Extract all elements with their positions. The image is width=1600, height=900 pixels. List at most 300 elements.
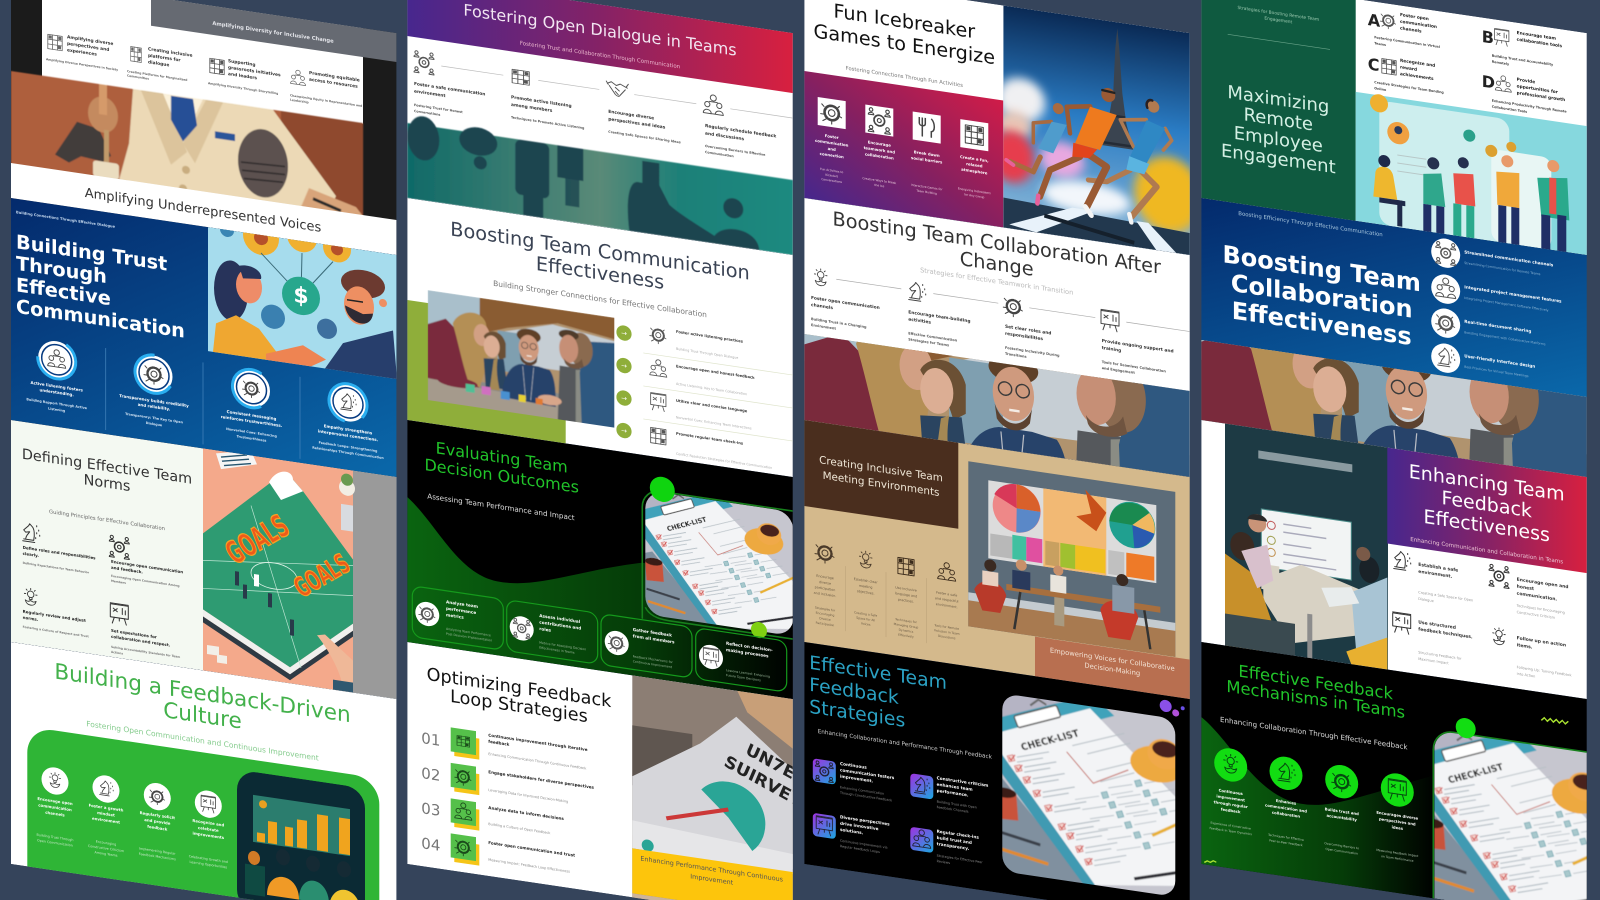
photo: silhouettes on teal xyxy=(407,114,793,255)
activity 3: Team Building xyxy=(916,188,937,196)
item: review xyxy=(23,587,89,639)
item: recognize: improvements xyxy=(193,830,225,840)
green panel xyxy=(27,726,379,900)
heading: Strategies xyxy=(809,696,905,732)
item: equitable access: access to resources xyxy=(309,77,358,90)
photo: checklist: CHECK-LIST xyxy=(666,515,708,533)
item: recognize: Learning Opportunities xyxy=(189,860,227,870)
heading: Through xyxy=(16,252,107,288)
photo: checklist xyxy=(1388,708,1600,900)
heading: Fostering Open Dialogue in Teams xyxy=(463,0,737,60)
header block: Creating Inclusive Team xyxy=(819,454,943,484)
item: support: and Engagement xyxy=(1102,366,1135,375)
numbered row 02 xyxy=(421,759,594,812)
photo: meeting with charts xyxy=(968,461,1175,657)
column: consistent messaging: Nonverbal Cues: Enhancing xyxy=(226,427,277,438)
feature 1: Streamlined communication channels xyxy=(1464,249,1554,268)
activity 2: Encourage xyxy=(868,139,891,148)
photo: survey paper xyxy=(632,675,806,900)
item D: professional growth xyxy=(1517,90,1565,103)
Eiffel tower xyxy=(1101,26,1133,150)
caption box: Empowering Voices for Collaborative xyxy=(1050,646,1175,673)
item: schedule: and discussions xyxy=(705,131,745,142)
item: continuous improvement xyxy=(1210,745,1252,836)
item: review: norms. xyxy=(23,615,39,622)
item: honest communication: honest xyxy=(1517,584,1535,592)
column: empathy: Relationships Through Communication xyxy=(312,446,384,460)
heading: Effectiveness xyxy=(536,252,664,294)
numbered row 01: feedback xyxy=(488,739,510,747)
item: safe environment: Establish a safe xyxy=(1418,563,1458,574)
activity 3: social barriers xyxy=(911,155,943,165)
item: open channels: Environment xyxy=(811,323,836,331)
subheading: Guiding Principles for Effective Collaboration xyxy=(49,509,165,532)
item: action items: into Action xyxy=(1517,672,1535,679)
column: empathy: interpersonal connections. xyxy=(318,428,379,442)
feature 4: Best Practices for Virtual Team Meetings xyxy=(1464,365,1529,378)
feature 3: Real-time document sharing xyxy=(1464,319,1531,334)
heading: Fun Icebreaker xyxy=(833,0,975,43)
item: solicit: and provide xyxy=(144,817,171,826)
item: clear roles: responsibilities xyxy=(1005,331,1043,342)
item: constructive criticism: Feedback Channels xyxy=(937,805,969,814)
numbered row 01: Continuous improvement through iterative xyxy=(488,733,587,752)
item: growth: mindset xyxy=(97,810,115,818)
card: contributions: Effectiveness in Teams xyxy=(539,646,575,655)
item: review: Fostering a Culture of Respect and Trust xyxy=(23,625,89,639)
divider lines xyxy=(106,348,300,459)
item: inclusive platforms: dialogue xyxy=(148,59,169,68)
card: analyze metrics: Post Decision Implementation xyxy=(446,632,492,643)
subheading: Fostering Trust and Collaboration Through Communication xyxy=(520,41,681,70)
item: objectives: Voices xyxy=(861,621,871,627)
item: diverse perspectives: Creating Safe Spaces for Sharing Ideas xyxy=(608,130,681,144)
item D: opportunities for xyxy=(1517,83,1559,96)
activity 2: collaboration xyxy=(865,151,894,161)
kicker: Boosting Efficiency Through Effective Communication xyxy=(1238,211,1383,238)
item: support: Tools for Seamless Collaboration xyxy=(1102,360,1166,373)
list arrows: → xyxy=(621,393,627,403)
slide: Amplifying Underrepresented Voices xyxy=(11,0,397,256)
item B: collaboration tools xyxy=(1517,37,1562,49)
item: participation: participation xyxy=(815,585,835,592)
item: continuous improvement: Continuous xyxy=(1219,788,1243,796)
item: constructive criticism: Building Trust with Open xyxy=(937,800,977,810)
item: enhances communication xyxy=(1265,754,1307,848)
item: solicit xyxy=(139,780,176,861)
column: active listening: Listening xyxy=(48,407,66,413)
item: language: Managing Group xyxy=(894,622,918,630)
photo: survey paper: Improvement xyxy=(690,872,734,887)
heading: Collaboration xyxy=(1231,269,1413,324)
header block xyxy=(804,420,958,529)
photo: survey paper: UN7E xyxy=(743,740,798,784)
green wave background xyxy=(1201,717,1436,899)
heading: Mechanisms in Teams xyxy=(1226,677,1405,722)
item: amplifying perspectives: experiences xyxy=(67,47,97,58)
column 3 of slides xyxy=(804,0,1277,900)
item: diverse perspectives: Continuous Improvement via xyxy=(840,839,888,850)
subheading: Enhancing Collaboration Through Effective Feedback xyxy=(1220,715,1408,752)
card: gather feedback: Continuous Improvement xyxy=(633,659,673,669)
item: clear roles xyxy=(1003,298,1060,364)
heading: Feedback xyxy=(809,674,899,709)
item: enhances communication: Peer-to-Peer Feedback xyxy=(1269,838,1303,847)
item: enhances communication: Techniques for Effective xyxy=(1268,833,1304,842)
heading: Boosting Team xyxy=(1222,240,1421,297)
item D: Enhancing Productivity Through Remote xyxy=(1492,99,1567,114)
item: expectations xyxy=(110,603,180,664)
heading: Maximizing xyxy=(1227,82,1329,118)
item: roles: clearly. xyxy=(23,551,39,558)
column: transparency: Dialogue xyxy=(146,421,163,427)
activity 2: teamwork and xyxy=(864,145,895,155)
item: diverse perspectives: perspectives and xyxy=(1379,816,1416,827)
item: objectives: Creating a Safe xyxy=(854,610,877,618)
item: equitable access xyxy=(290,70,362,107)
heading: Boosting Team Communication xyxy=(450,217,750,285)
item: team building xyxy=(908,281,970,351)
item: safe environment: Creating a Safe Space for Open xyxy=(1418,590,1473,603)
item: amplifying perspectives xyxy=(46,31,118,72)
column: transparency xyxy=(119,353,189,426)
slide: Enhancing Team Feedback Effectiveness xyxy=(1201,420,1587,699)
numbered row 04: Foster open communication and trust xyxy=(488,840,575,858)
heading: Norms xyxy=(84,472,130,495)
activity 3 xyxy=(911,111,943,197)
item: recognize: celebrate xyxy=(198,825,219,833)
item: clear roles: Fostering Inclusivity During xyxy=(1005,346,1059,358)
card: analyze metrics: performance xyxy=(446,606,476,615)
heading: Effective Feedback xyxy=(1238,662,1393,703)
heading: Employee xyxy=(1234,123,1323,157)
heading: Evaluating Team xyxy=(436,438,568,477)
item: diverse perspectives: ideas xyxy=(1392,824,1404,831)
heading: Loop Strategies xyxy=(450,687,588,727)
item: growth: Foster a growth xyxy=(89,803,123,813)
item: clear roles: Transitions xyxy=(1005,352,1027,359)
item: solicit: Regularly solicit xyxy=(140,810,175,820)
item: inclusive platforms: Creating inclusive xyxy=(148,47,192,59)
item: open channels: Foster open communication xyxy=(811,296,880,311)
photo: clay speaker at microphone xyxy=(11,71,363,219)
activity 4: Energizing Icebreakers xyxy=(958,186,991,195)
illustration: audience watching bar chart xyxy=(237,769,365,900)
heading: Enhancing Team xyxy=(1409,460,1565,506)
item: respectful environment: environment. xyxy=(936,602,958,609)
item: channels: Building Trust Through xyxy=(37,833,73,842)
photo: checklist xyxy=(957,672,1277,900)
item C: reward xyxy=(1400,64,1417,73)
left runner xyxy=(1033,119,1051,146)
connector lines xyxy=(441,66,792,118)
item B: Encourage team xyxy=(1517,31,1556,42)
kicker: Engagement xyxy=(1264,15,1293,25)
item: support: Provide ongoing support and xyxy=(1102,339,1174,355)
item: respectful environment: Inclusion in Team xyxy=(934,628,960,636)
column: empathy xyxy=(312,382,384,459)
card: reflect xyxy=(696,628,787,692)
item: inclusive platforms: Communities xyxy=(127,74,149,81)
item: expectations: Setting Accountability Standards for Team xyxy=(111,645,180,659)
activity 4 xyxy=(958,119,991,200)
item: constructive criticism xyxy=(910,771,989,817)
item: open channels: channels xyxy=(811,302,833,311)
item: open communication: and feedback. xyxy=(111,565,143,575)
slide: Evaluating Team Decision Outcomes xyxy=(407,420,850,708)
kicker: Strategies for Boosting Remote Team xyxy=(1237,6,1319,23)
list arrows: → xyxy=(621,328,627,338)
accent dots xyxy=(650,475,767,639)
item: safe environment: Foster a safe communication xyxy=(414,82,485,98)
slide subtitle band text: Amplifying Diversity for Inclusive Change xyxy=(212,21,334,45)
green side panel xyxy=(1201,0,1356,221)
list item 1: Building Trust Through Open Dialogue xyxy=(676,347,738,360)
activity 3: Break down xyxy=(914,149,940,158)
numbered row 03: 03 xyxy=(421,799,440,820)
column: active listening: Active listening fosters xyxy=(31,380,83,393)
item C: Creative Strategies for Team Bonding xyxy=(1374,80,1444,95)
runners xyxy=(1006,73,1172,228)
item: active listening: among members xyxy=(511,102,553,114)
item: trust: Builds trust and xyxy=(1325,806,1359,816)
activity 2: Creative Ways to Break xyxy=(862,176,896,185)
item: objectives: objectives. xyxy=(857,589,875,596)
activity 1: Fun Activities to xyxy=(820,167,843,174)
item: equitable access: Championing Equity in Representation and xyxy=(290,93,362,108)
item: diverse perspectives: solutions. xyxy=(840,827,864,835)
item: channels: communication xyxy=(38,802,72,812)
item: roles: Define roles and responsibilities xyxy=(23,545,96,561)
item: recognize: Celebrating Growth and xyxy=(189,854,228,864)
list dividers xyxy=(643,353,793,441)
slide: Boosting Team Collaboration After Change xyxy=(804,198,1198,564)
numbered row 02: Leveraging Data for Improved Decision-Making xyxy=(488,788,568,804)
item: continuous communication: communication fosters xyxy=(840,767,895,780)
item: safe environment: Dialogue xyxy=(1418,597,1434,603)
item: equitable access: Leadership xyxy=(290,98,309,105)
item: open communication: Encourage open communication xyxy=(111,559,183,574)
item: continuous communication: Enhancing Communication xyxy=(840,785,884,796)
item: amplifying perspectives: perspectives and xyxy=(67,41,109,53)
activity 2 xyxy=(862,104,896,190)
item: diverse perspectives: perspectives and ideas xyxy=(608,116,666,131)
item: schedule xyxy=(703,94,777,165)
item: constructive criticism: performance. xyxy=(937,788,969,798)
heading: Change xyxy=(960,247,1034,281)
item: regular check-ins: Regular check-ins xyxy=(937,829,979,840)
item: regular check-ins: Reviews xyxy=(937,859,950,865)
photo: survey paper: Enhancing Performance Through Continuous xyxy=(640,855,783,884)
item: grassroots: Amplifying Diversity Through Storytelling xyxy=(208,81,278,96)
card: contributions: Assess individual xyxy=(539,613,580,624)
item: diverse perspectives: Measuring Feedback Impact xyxy=(1376,848,1418,858)
right runner xyxy=(1088,164,1130,186)
item: continuous improvement: feedback xyxy=(1221,807,1241,814)
item B: Building Trust and Accountability xyxy=(1492,54,1553,67)
item: equitable access: Promoting equitable xyxy=(309,71,360,84)
item: constructive criticism: Constructive criticism xyxy=(937,775,988,788)
item: recognize: Recognize and xyxy=(192,818,224,828)
figures xyxy=(1373,133,1569,254)
subheading: Enhancing Communication and Collaboration in Teams xyxy=(1410,537,1563,566)
numbered row 02: 02 xyxy=(421,764,440,785)
feature 1: Streamlining Communication for Remote Teams xyxy=(1464,261,1541,276)
item: amplifying perspectives: Amplifying Diverse Perspectives in Society xyxy=(46,57,118,72)
item: continuous improvement: Experience of Constructive xyxy=(1211,821,1251,831)
item: honest communication: communication. xyxy=(1517,591,1557,603)
numbered row 03: Analyze data to inform decisions xyxy=(488,805,564,821)
column: empathy: Empathy strengthens xyxy=(324,423,372,435)
numbered row 04: 04 xyxy=(421,834,440,855)
accent dots xyxy=(1160,699,1185,718)
card: analyze metrics xyxy=(412,586,503,650)
item A xyxy=(1368,7,1440,55)
item: action items: Following Up: Turning Feedback xyxy=(1517,665,1572,677)
item: solicit: Implementing Regular xyxy=(139,846,176,856)
item: continuous communication: Through Constructive Feedback xyxy=(839,791,892,802)
item: structured feedback: Maximum Impact xyxy=(1418,657,1449,665)
item: open communication: Encouraging Open Communication Among xyxy=(111,574,180,588)
item: diverse perspectives: drive innovative xyxy=(840,821,879,831)
item: open channels xyxy=(811,268,880,337)
center runner xyxy=(1040,151,1080,203)
item: growth: Constructive Criticism xyxy=(88,844,124,853)
subheading: Building Stronger Connections for Effective Collaboration xyxy=(493,279,707,319)
column dividers xyxy=(846,566,927,643)
photo: meeting room with whiteboard xyxy=(1225,424,1388,670)
item D: Collaboration Tools xyxy=(1492,105,1527,114)
slide: Defining Effective Team Norms xyxy=(11,415,397,699)
item: safe environment xyxy=(414,50,485,124)
item: structured feedback: feedback techniques. xyxy=(1418,626,1473,640)
squiggle accents xyxy=(1204,667,1568,900)
item: enhances communication: collaboration xyxy=(1272,810,1300,819)
item: language: Effectively xyxy=(898,633,914,639)
slide: Creating Inclusive Team Meeting Environments xyxy=(804,420,1191,700)
illustration: remote team xyxy=(1356,91,1588,257)
item C: achievements xyxy=(1400,71,1434,82)
photo: checklist: CHECK-LIST xyxy=(1020,728,1081,754)
column: active listening: Building Rapport Through Active xyxy=(26,397,87,410)
accent dot xyxy=(1456,717,1476,740)
photo: survey paper: SUIRVEY xyxy=(721,752,806,812)
heading: Boosting Team Collaboration After xyxy=(832,207,1161,279)
item D: D xyxy=(1482,72,1495,93)
item: diverse perspectives: Encourages diverse xyxy=(1376,810,1418,821)
item: support: training xyxy=(1102,345,1121,354)
list item 1: Foster active listening practices xyxy=(676,330,744,344)
slide: Boosting Team Collaboration Effectiveness xyxy=(1197,197,1591,562)
item: structured feedback xyxy=(1393,612,1473,669)
item: diverse perspectives: Regular Feedback Loops xyxy=(840,844,880,854)
item: growth: Among Teams xyxy=(94,850,118,858)
item: participation: Encouraging xyxy=(816,611,834,617)
item: respectful environment: Tools for Remote xyxy=(934,623,959,631)
column 4 of slides xyxy=(1197,0,1600,900)
numbered row 03: Building a Culture of Open Feedback xyxy=(488,822,550,835)
card: contributions xyxy=(507,600,598,664)
item: expectations: collaboration and respect. xyxy=(111,634,171,648)
item: honest communication xyxy=(1489,564,1569,622)
numbered row 04 xyxy=(421,829,575,880)
feature 2: Integrated project management features xyxy=(1464,284,1562,304)
card: contributions: Metrics for Assessing Decision xyxy=(539,641,586,651)
photo: team close-up xyxy=(1197,272,1591,562)
activity 1: Kickstart xyxy=(825,173,839,179)
item: regular check-ins xyxy=(910,825,983,870)
numbered row 01: 01 xyxy=(421,729,440,750)
photo: checklist xyxy=(620,475,850,674)
item A: communication xyxy=(1400,19,1437,30)
subheading: Enhancing Collaboration and Performance Through Feedback xyxy=(818,729,993,761)
list item 3: Nonverbal Cues: Enhancing Team Interactions xyxy=(676,415,752,431)
item B: B xyxy=(1482,27,1494,48)
slide: Effective Feedback Mechanisms in Teams xyxy=(1201,642,1600,900)
card: analyze metrics: Analyze team xyxy=(446,599,478,609)
item: schedule: Regularly schedule feedback xyxy=(705,124,776,140)
item: growth: Encouraging xyxy=(96,840,116,847)
item: objectives: meeting xyxy=(859,584,872,590)
list item 3 xyxy=(651,393,752,431)
card: reflect: Future Team Decisions xyxy=(726,673,761,682)
feature 3: Boosting Engagement with Collaborative Platforms xyxy=(1464,330,1546,346)
item: expectations: Actions xyxy=(111,650,123,656)
slide: Boosting Team Communication Effectiveness xyxy=(407,198,793,477)
item: safe environment xyxy=(1394,550,1473,609)
slide: Effective Team Feedback Strategies xyxy=(804,642,1277,900)
item: structured feedback: Use structured xyxy=(1418,620,1456,631)
item A: Foster open xyxy=(1400,13,1429,22)
list item 2 xyxy=(650,359,755,397)
heading: Amplifying Underrepresented Voices xyxy=(85,186,321,236)
item: schedule: Communication xyxy=(705,150,734,158)
heading: Engagement xyxy=(1221,140,1336,178)
activity 1 xyxy=(815,97,849,185)
item: language: practices. xyxy=(898,597,914,604)
item: continuous improvement: improvement xyxy=(1216,793,1245,803)
feature 2: Integrating Project Management Software Effectively xyxy=(1464,296,1549,312)
card: gather feedback: Feedback Mechanisms for xyxy=(633,654,673,664)
item: safe environment: environment xyxy=(414,89,445,99)
item: expectations: Set expectations for xyxy=(111,628,157,640)
item: channels: channels xyxy=(45,810,65,818)
item: trust: accountability xyxy=(1327,813,1357,822)
item: inclusive platforms: platforms for xyxy=(148,53,181,64)
feature 1 xyxy=(1431,237,1554,284)
list item 2: Active Listening: Key to Team Collaboration xyxy=(676,382,747,396)
item: honest communication: Constructive Criticism xyxy=(1517,610,1556,620)
activity 2: the Ice xyxy=(874,183,884,188)
illustration: handshake and dollar network: $ xyxy=(293,282,309,310)
card: reflect: Reflect on decision- xyxy=(726,641,773,653)
column: consistent messaging: Trustworthiness xyxy=(237,434,266,443)
activity 1: communication xyxy=(815,138,849,148)
item: amplifying perspectives: Amplifying diverse xyxy=(67,35,113,47)
item: regular check-ins: transparency. xyxy=(937,841,970,851)
item: growth: environment xyxy=(92,816,120,825)
card: analyze metrics: Analyzing Team Performance xyxy=(446,627,491,637)
heading: Remote xyxy=(1244,104,1313,136)
item: active listening xyxy=(511,69,585,130)
item: grassroots xyxy=(208,55,281,96)
green backing block xyxy=(407,300,566,443)
item: team building: Encourage team-building xyxy=(908,310,970,325)
feature 4: User-friendly interface design xyxy=(1464,353,1535,369)
feature 4 xyxy=(1431,342,1535,386)
item: safe environment: Fostering Trust for Honest xyxy=(414,103,463,114)
item: language: Use inclusive xyxy=(895,585,917,593)
